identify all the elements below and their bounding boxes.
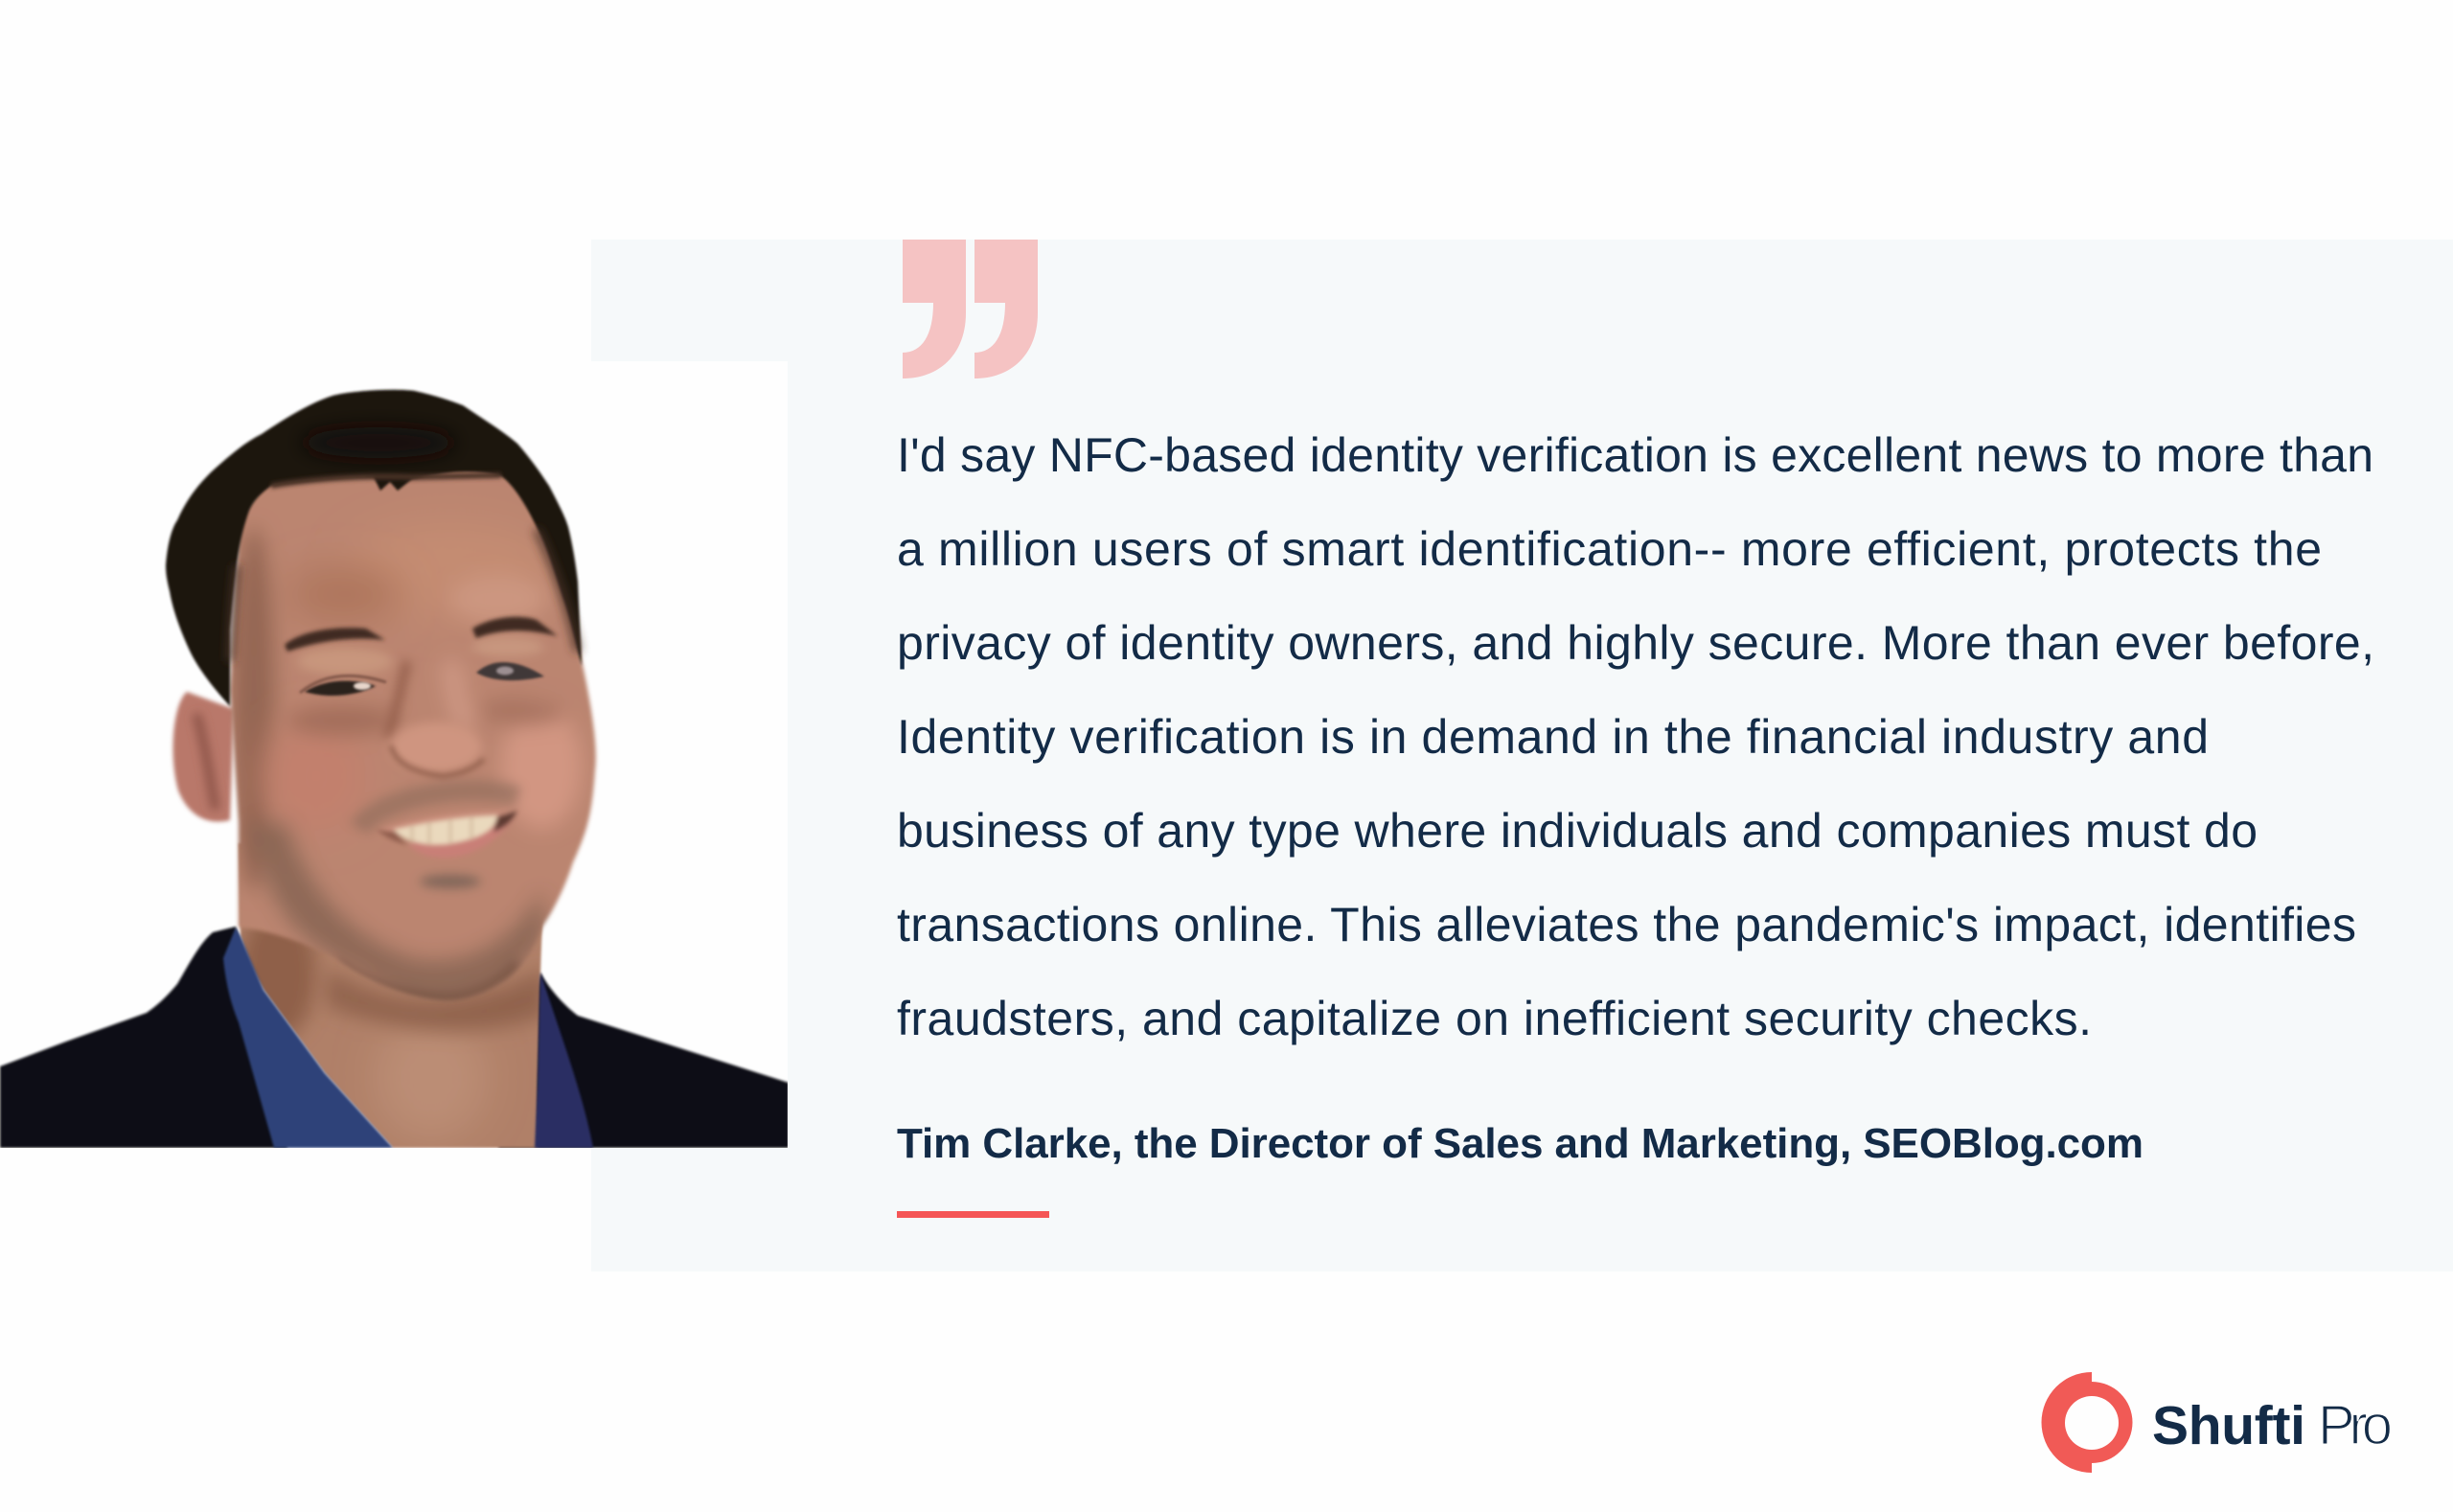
icon: logo ring <box>2042 1372 2133 1473</box>
quote text: a million users of smart identification-- more efficient, protects the <box>897 522 2322 576</box>
quote text: fraudsters, and capitalize on inefficient security checks. <box>897 992 2092 1045</box>
logo wordmark: Pro <box>2318 1394 2393 1456</box>
quote text <box>897 428 2374 1045</box>
accent underline <box>897 1211 1049 1218</box>
quote attribution: Tim Clarke, the Director of Sales and Marketing, SEOBlog.com <box>897 1120 2144 1167</box>
quote text: transactions online. This alleviates the pandemic's impact, identifies <box>897 898 2356 951</box>
quote text: Identity verification is in demand in the financial industry and <box>897 710 2209 764</box>
panel: quote background <box>591 240 2453 1271</box>
quote text: privacy of identity owners, and highly secure. More than ever before, <box>897 616 2374 670</box>
logo: Shufti Pro <box>2042 1372 2393 1473</box>
icon: quotation mark <box>903 240 1038 378</box>
photo: portrait of Tim Clarke <box>0 361 789 1159</box>
logo wordmark: Shufti <box>2152 1395 2305 1456</box>
quote text: I'd say NFC-based identity verification is excellent news to more than <box>897 428 2373 482</box>
quote text: business of any type where individuals and companies must do <box>897 804 2258 858</box>
